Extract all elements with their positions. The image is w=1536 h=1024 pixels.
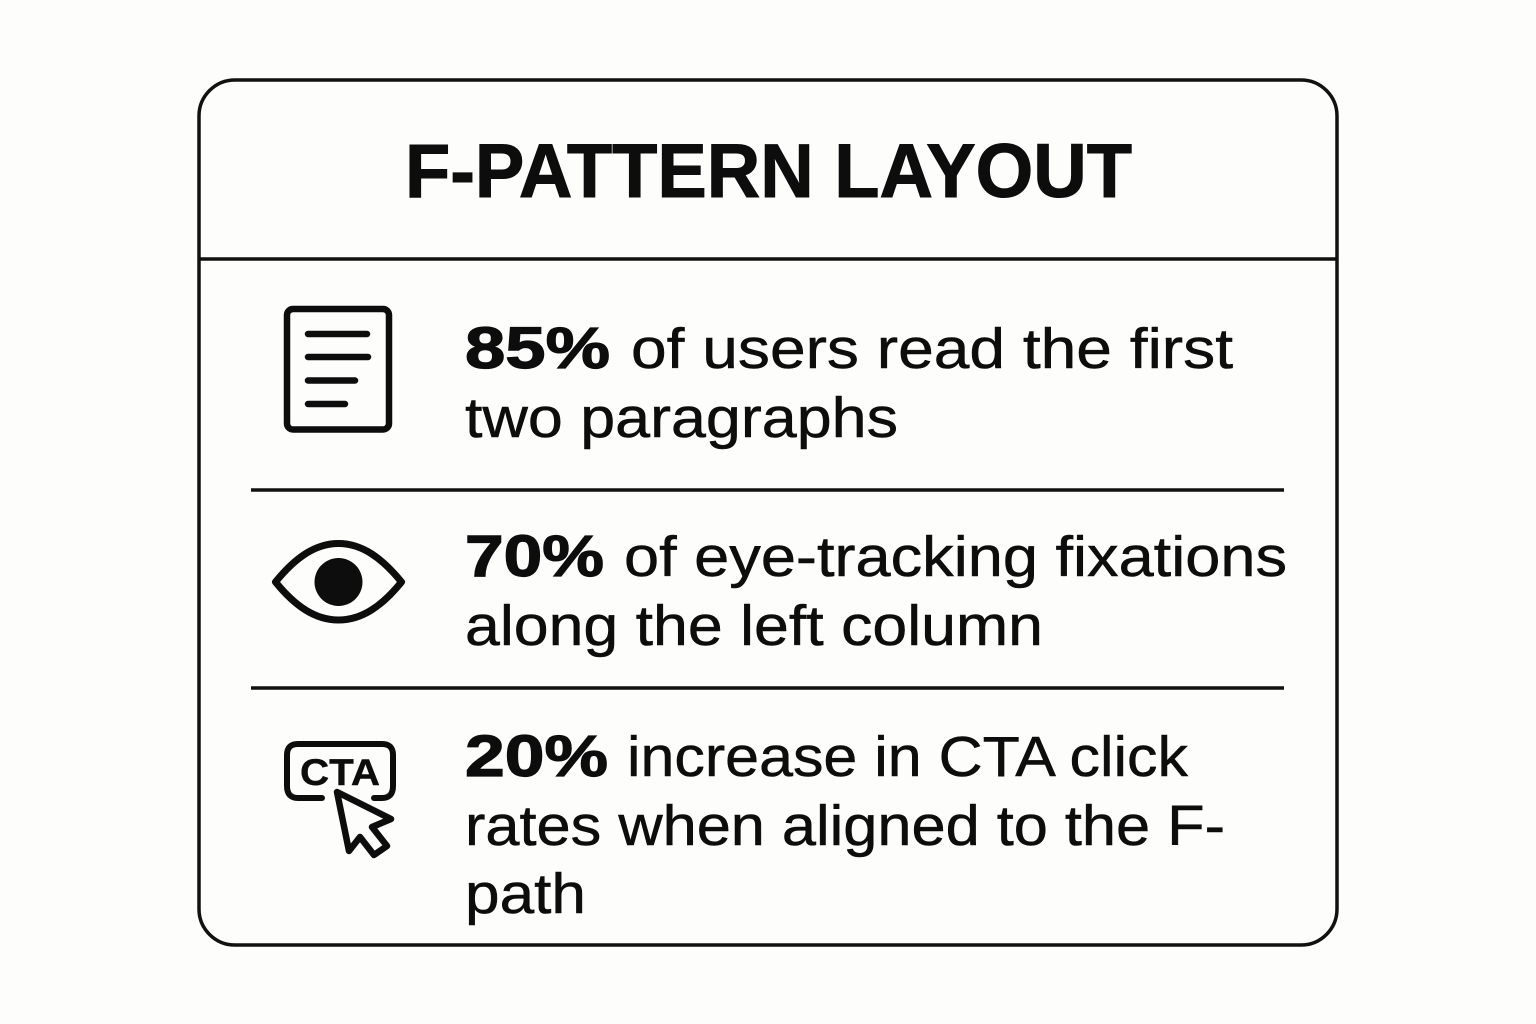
text: stat 85% [465,316,1233,450]
text: stat 85%: of users read the first [631,317,1233,381]
icon: CTA button with cursor: CTA [300,752,380,793]
icon: document [287,309,389,430]
panel: card [199,80,1337,945]
text: stat 85%: two paragraphs [465,386,898,450]
text: stat 20%: rates when aligned to the F- [465,794,1225,858]
title: F-PATTERN LAYOUT [405,129,1132,214]
text: stat 70%: 70% [465,524,604,589]
text: stat 20%: increase in CTA click [627,725,1189,789]
text: stat 70%: along the left column [465,594,1043,658]
text: stat 85%: 85% [465,316,610,381]
text: stat 70%: of eye-tracking fixations [624,525,1287,589]
icon: eye [276,544,402,620]
text: stat 20% [465,724,1225,926]
icon: CTA button with cursor [287,744,393,855]
text: stat 70% [465,524,1287,658]
text: stat 20%: 20% [465,724,608,789]
text: stat 20%: path [465,862,586,926]
